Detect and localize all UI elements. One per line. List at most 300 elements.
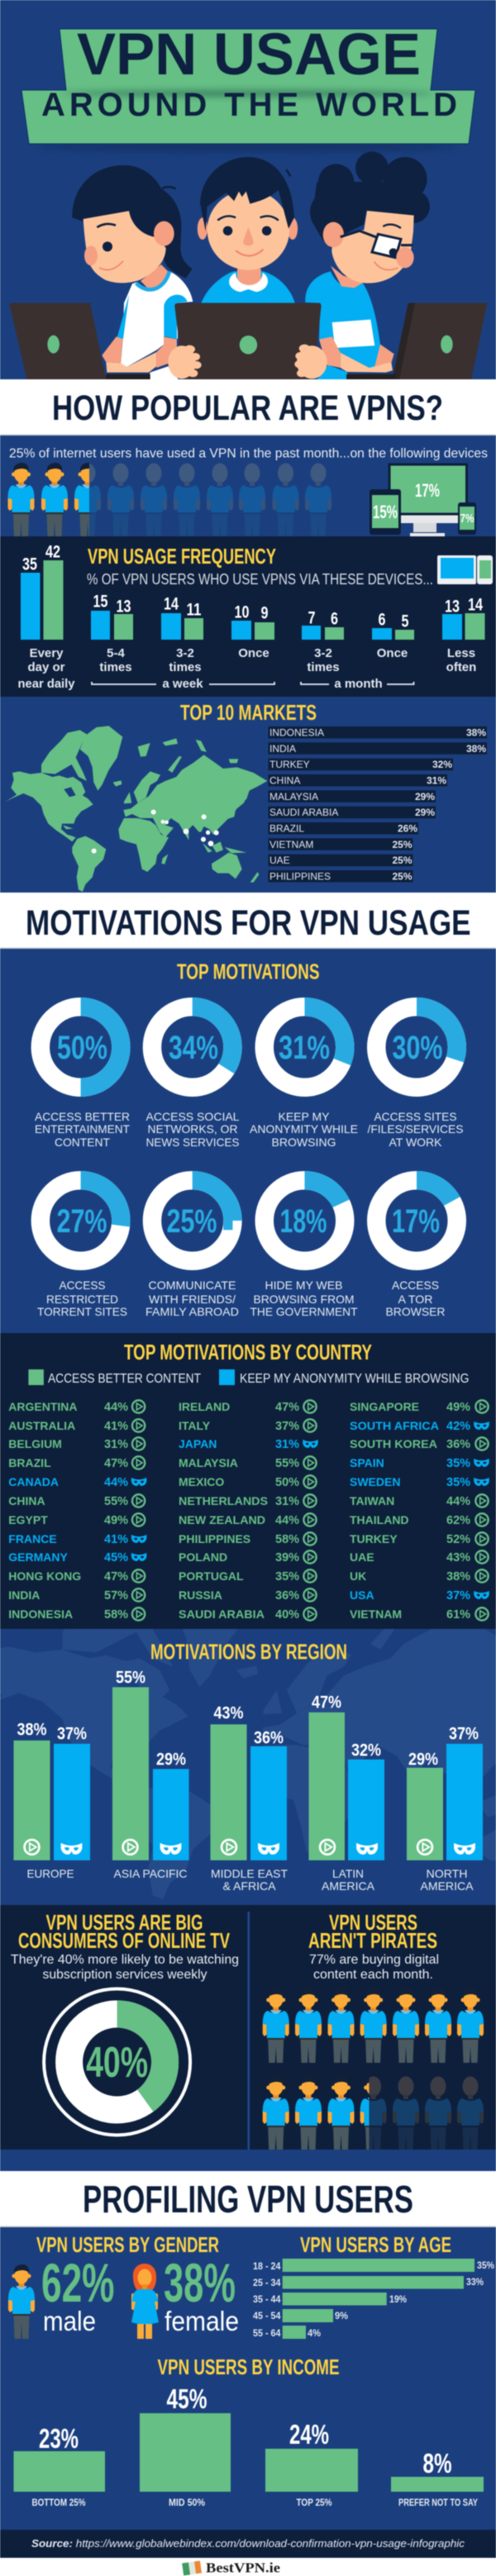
heading: top motivations: TOP MOTIVATIONS	[177, 959, 319, 983]
source bar: Source: https://www.globalwebindex.com/download-confirmation-vpn-usage-infographic	[31, 2537, 465, 2550]
ranked markets bar list: CHINA	[269, 775, 300, 787]
bar chart: regions: 55%	[116, 1668, 145, 1688]
donut: 50% entertainment: ACCESS BETTER	[35, 1110, 130, 1123]
ranked markets bar list: 29%	[415, 791, 435, 802]
heading: top 10 markets: TOP 10 MARKETS	[180, 700, 317, 725]
bar chart: age: 35 - 44	[253, 2293, 281, 2305]
title banner	[21, 22, 475, 151]
panel: top motivations by country	[0, 1333, 496, 1629]
row: Saudi Arabia: SAUDI ARABIA	[179, 1607, 265, 1621]
device usage statement: 25% of internet users have used a VPN in the past month...on the following devices	[9, 446, 488, 461]
laptop: centre	[174, 303, 322, 379]
row: Brazil: 47%	[104, 1457, 128, 1470]
donut: 18% hide browsing: 18%	[279, 1203, 327, 1240]
donut: 25% communicate abroad	[145, 1180, 239, 1318]
row: South Africa	[350, 1419, 489, 1433]
row: Malaysia: 55%	[275, 1457, 299, 1470]
legend: KEEP MY ANONYMITY WHILE BROWSING	[240, 1372, 470, 1386]
row: USA	[350, 1588, 489, 1602]
ranked markets bar list: TURKEY	[269, 759, 310, 770]
frequency category labels: 3-2	[176, 646, 194, 660]
panel: motivations by region	[0, 1628, 496, 1906]
row: South Korea: 36%	[446, 1438, 470, 1451]
icon: laptop and tablet legend	[437, 555, 493, 584]
row: Philippines: 58%	[275, 1533, 299, 1546]
frequency category labels: times	[99, 660, 132, 674]
footer: BestVPN.ie logo: BestVPN.ie	[206, 2560, 280, 2575]
bar chart: income: 23%	[39, 2423, 79, 2454]
icon: devices with percentages: 17%	[415, 480, 440, 501]
laptop: left	[9, 303, 150, 379]
row: France: 41%	[104, 1533, 128, 1546]
donut: 34% social networks: NEWS SERVICES	[145, 1136, 240, 1149]
heading: usage frequency: VPN USAGE FREQUENCY	[88, 544, 276, 569]
ranked markets bar list: 25%	[392, 871, 413, 883]
donut: 30% work sites: AT WORK	[389, 1136, 442, 1149]
ranked markets bar list: INDIA	[269, 743, 296, 755]
bar chart: frequency by device: 6	[331, 610, 338, 628]
donut: 31% anonymity	[250, 1007, 358, 1149]
bar chart: frequency by device: 13	[116, 597, 131, 617]
spacer strip	[0, 2150, 496, 2171]
bar chart: frequency by device: 7	[308, 608, 316, 628]
row: Thailand	[350, 1513, 489, 1527]
row: Spain	[350, 1456, 489, 1470]
title banner: AROUND THE WORLD	[41, 87, 457, 123]
region labels: ASIA PACIFIC	[114, 1867, 187, 1880]
heading: by country: TOP MOTIVATIONS BY COUNTRY	[124, 1340, 372, 1364]
row: Italy: 37%	[275, 1420, 299, 1433]
donut: 34% social networks: 34%	[169, 1030, 218, 1066]
row: Russia: 36%	[275, 1589, 299, 1602]
donut: 31% anonymity: ANONYMITY WHILE	[250, 1122, 358, 1136]
ranked markets bar list: INDONESIA	[269, 727, 324, 739]
frequency category labels: a month	[334, 677, 383, 691]
region labels: EUROPE	[26, 1867, 74, 1880]
world map with market dots	[6, 726, 267, 892]
icon row: 25% of people highlighted	[8, 463, 331, 537]
row: South Korea: SOUTH KOREA	[350, 1437, 437, 1450]
region labels: LATIN	[332, 1867, 364, 1880]
pirates text block: VPN USERS	[329, 1910, 417, 1935]
bar chart: age: 25 - 34	[253, 2277, 281, 2288]
donut: 18% hide browsing: BROWSING FROM	[253, 1293, 354, 1306]
donut: 18% hide browsing	[250, 1180, 358, 1318]
donut: 25% communicate abroad: COMMUNICATE	[149, 1278, 236, 1292]
panel: profiling	[0, 2227, 496, 2530]
row: Singapore: SINGAPORE	[350, 1400, 419, 1413]
online TV text block	[11, 1910, 239, 1982]
bar chart: frequency by device: 5	[402, 612, 409, 631]
row: Portugal: 35%	[275, 1570, 299, 1583]
bar chart: frequency by device: 10	[235, 603, 250, 621]
row: Philippines	[179, 1532, 317, 1546]
donut: 17% tor browser: BROWSER	[385, 1305, 445, 1318]
bar chart: age	[253, 2259, 494, 2339]
row: South Korea	[350, 1437, 489, 1451]
row: Egypt: EGYPT	[8, 1513, 48, 1526]
section band: profiling VPN users	[0, 2171, 496, 2228]
donut: 25% communicate abroad: 25%	[167, 1203, 217, 1240]
heading: by region: MOTIVATIONS BY REGION	[150, 1640, 347, 1664]
country column 2	[179, 1400, 318, 1621]
illustration: three people on laptops	[9, 151, 487, 380]
row: Vietnam	[350, 1607, 489, 1621]
row: Singapore	[350, 1400, 489, 1414]
row: Portugal: PORTUGAL	[179, 1569, 244, 1583]
ranked markets bar list: 32%	[432, 759, 452, 770]
online TV text block: CONSUMERS OF ONLINE TV	[18, 1928, 230, 1953]
ranked markets bar list: 38%	[466, 743, 486, 755]
bar chart: income: MID 50%	[169, 2497, 205, 2508]
panel: top motivations	[0, 949, 496, 1333]
ranked markets bar list: 25%	[392, 839, 413, 850]
frequency category labels: Once	[377, 646, 408, 660]
row: Russia	[179, 1588, 317, 1602]
heading: income: VPN USERS BY INCOME	[157, 2355, 339, 2379]
donut: 31% anonymity: BROWSING	[271, 1136, 336, 1149]
donut: 31% anonymity: 31%	[279, 1030, 330, 1066]
donut: 30% work sites	[367, 1007, 463, 1149]
row: Belgium: BELGIUM	[8, 1437, 62, 1450]
bar chart: regions: 37%	[449, 1724, 479, 1744]
region labels: MIDDLE EAST	[211, 1867, 288, 1880]
bar chart: age: 55 - 64	[253, 2327, 281, 2339]
donut: 30% work sites: 30%	[392, 1030, 443, 1066]
row: UAE: UAE	[350, 1550, 374, 1564]
row: Sweden	[350, 1475, 489, 1489]
row: Netherlands: 31%	[275, 1495, 299, 1508]
frequency category labels	[18, 646, 476, 691]
laptop: right	[346, 303, 487, 379]
row: Poland: 39%	[275, 1551, 299, 1564]
bar chart: frequency by device: 15	[93, 592, 108, 612]
bar chart: frequency by device: 6	[379, 610, 385, 630]
row: Hong Kong: HONG KONG	[8, 1569, 81, 1583]
stat: female 38%: 38%	[164, 2252, 236, 2313]
row: Canada	[8, 1475, 146, 1489]
row: Australia: 41%	[104, 1420, 128, 1433]
row: Taiwan: TAIWAN	[350, 1494, 394, 1507]
donut: 27% torrent sites: ACCESS	[60, 1278, 106, 1292]
bar chart: frequency by device: 9	[261, 603, 268, 623]
panel: device usage	[0, 436, 496, 537]
hero panel	[0, 0, 496, 380]
frequency category labels: 3-2	[314, 646, 332, 660]
bar chart: income	[13, 2383, 484, 2508]
frequency category labels: Less	[447, 646, 475, 660]
row: Thailand: 62%	[446, 1514, 470, 1527]
bar chart: income: TOP 25%	[296, 2497, 332, 2508]
row: UK: UK	[350, 1569, 366, 1583]
row: Mexico	[179, 1475, 317, 1489]
row: Japan: JAPAN	[179, 1437, 217, 1450]
row: Argentina: ARGENTINA	[8, 1400, 78, 1413]
frequency category labels: times	[169, 660, 202, 674]
stat: female 38%	[164, 2252, 239, 2336]
row: Mexico: MEXICO	[179, 1475, 224, 1488]
country column 3	[350, 1400, 489, 1621]
region labels: NORTH	[427, 1867, 468, 1880]
row: Japan: 31%	[275, 1438, 299, 1451]
row: Malaysia: MALAYSIA	[179, 1456, 238, 1469]
row: Taiwan: 44%	[446, 1495, 470, 1508]
row: Hong Kong	[8, 1569, 145, 1583]
icon: devices with percentages: 7%	[460, 512, 475, 526]
panel: VPN usage frequency	[0, 536, 496, 697]
donut: 50% entertainment	[35, 1007, 130, 1149]
donut: 27% torrent sites: TORRENT SITES	[37, 1305, 127, 1318]
row: New Zealand: 44%	[275, 1514, 299, 1527]
region labels: AMERICA	[322, 1879, 375, 1893]
donut: 27% torrent sites: RESTRICTED	[46, 1293, 118, 1306]
frequency category labels: 5-4	[107, 646, 125, 660]
frequency category labels: a week	[162, 677, 203, 691]
stat: male 62%: male	[43, 2306, 96, 2336]
bar chart: frequency by device: 42	[45, 542, 60, 562]
bar chart: regions: 29%	[408, 1750, 438, 1769]
ranked markets bar list: VIETNAM	[269, 839, 313, 850]
row: Singapore: 49%	[446, 1401, 470, 1414]
row: Netherlands	[179, 1494, 317, 1508]
row: Turkey: 52%	[446, 1533, 470, 1546]
panel: online TV and pirates	[0, 1905, 496, 2150]
row: Belgium	[8, 1437, 145, 1451]
online TV text block: subscription services weekly	[43, 1968, 207, 1982]
row: UAE	[350, 1550, 489, 1564]
bar chart: age: 4%	[308, 2327, 321, 2339]
donut: 30% work sites: /FILES/SERVICES	[367, 1122, 463, 1136]
row: USA: 37%	[446, 1589, 470, 1602]
icon: devices with percentages: 15%	[373, 502, 398, 522]
donut: 18% hide browsing: THE GOVERNMENT	[250, 1305, 358, 1318]
row: Japan	[179, 1437, 318, 1451]
row: France: FRANCE	[8, 1532, 57, 1545]
source bar	[0, 2530, 496, 2558]
legend	[28, 1369, 469, 1386]
row: Germany: GERMANY	[8, 1550, 69, 1564]
row: Italy: ITALY	[179, 1419, 211, 1432]
donut: 18% hide browsing: HIDE MY WEB	[265, 1278, 342, 1292]
bar chart: regions: 32%	[351, 1740, 381, 1760]
donut: 40% online TV: 40%	[86, 2039, 148, 2087]
bar chart: frequency by device: 14	[468, 595, 483, 615]
row: UAE: 43%	[446, 1551, 470, 1564]
region labels	[26, 1867, 474, 1893]
bar chart: regions: 47%	[312, 1693, 341, 1712]
bar chart: age: 33%	[466, 2276, 484, 2288]
row: Germany	[8, 1550, 146, 1564]
row: USA: USA	[350, 1588, 374, 1602]
donut: 25% communicate abroad: FAMILY ABROAD	[145, 1305, 239, 1318]
character: boy in centre	[198, 157, 298, 303]
ranked markets bar list: UAE	[269, 855, 290, 866]
online TV text block: They're 40% more likely to be watching	[11, 1953, 239, 1967]
row: Indonesia	[8, 1607, 145, 1621]
subheading: % OF VPN USERS WHO USE VPNS VIA THESE DEVICES...	[87, 571, 433, 588]
donut: 27% torrent sites	[37, 1180, 127, 1318]
icon grid: 77% of people highlighted	[263, 1988, 484, 2150]
row: India	[8, 1588, 145, 1602]
row: New Zealand: NEW ZEALAND	[179, 1513, 265, 1526]
row: Malaysia	[179, 1456, 317, 1470]
ranked markets bar list: PHILIPPINES	[269, 871, 331, 883]
bar chart: income: 8%	[423, 2448, 451, 2478]
row: Argentina: 44%	[104, 1401, 128, 1414]
row: New Zealand	[179, 1513, 317, 1527]
row: Spain: SPAIN	[350, 1456, 384, 1469]
bar chart: frequency by device: 35	[22, 555, 37, 574]
panel: top 10 markets	[0, 697, 496, 893]
ranked markets bar list: SAUDI ARABIA	[269, 807, 338, 818]
ranked markets bar list: 38%	[466, 727, 486, 739]
ranked markets bar list: 25%	[392, 855, 413, 866]
frequency category labels: Once	[238, 646, 269, 660]
ranked markets bar list: 31%	[427, 775, 446, 787]
row: Indonesia: INDONESIA	[8, 1607, 73, 1621]
frequency category labels: day or	[27, 660, 65, 674]
row: India: INDIA	[8, 1588, 40, 1602]
row: Belgium: 31%	[104, 1438, 128, 1451]
frequency category labels: Every	[30, 646, 64, 660]
region labels: AMERICA	[420, 1879, 474, 1893]
row: India: 57%	[104, 1589, 128, 1602]
row: Netherlands: NETHERLANDS	[179, 1494, 268, 1507]
row: Philippines: PHILIPPINES	[179, 1532, 250, 1545]
pirates text block	[308, 1910, 439, 1982]
row: South Africa: SOUTH AFRICA	[350, 1419, 439, 1432]
row: Australia: AUSTRALIA	[8, 1419, 75, 1432]
row: Spain: 35%	[446, 1457, 470, 1470]
row: Poland	[179, 1550, 317, 1564]
row: Brazil: BRAZIL	[8, 1456, 51, 1469]
row: Turkey	[350, 1532, 489, 1546]
row: Russia: RUSSIA	[179, 1588, 222, 1602]
stat: male 62%	[41, 2252, 114, 2336]
bar chart: age: 18 - 24	[253, 2260, 281, 2272]
row: Italy	[179, 1419, 317, 1433]
row: Poland: POLAND	[179, 1550, 227, 1564]
row: Saudi Arabia: 40%	[275, 1608, 299, 1621]
row: South Africa: 42%	[446, 1420, 470, 1433]
frequency category labels: times	[307, 660, 340, 674]
row: Turkey: TURKEY	[350, 1532, 398, 1545]
icon: male figure	[8, 2264, 35, 2339]
row: Sweden: SWEDEN	[350, 1475, 400, 1488]
bar chart: regions	[13, 1668, 483, 1860]
stat: female 38%: female	[165, 2306, 239, 2336]
donut: 34% social networks: NETWORKS, OR	[147, 1122, 238, 1136]
donut: 17% tor browser: 17%	[392, 1203, 440, 1240]
bar chart: income: 45%	[167, 2383, 207, 2414]
character: curly-haired boy with glasses	[305, 151, 430, 379]
legend: ACCESS BETTER CONTENT	[48, 1372, 201, 1386]
donut: 34% social networks	[145, 1007, 240, 1149]
row: Germany: 45%	[104, 1551, 128, 1564]
frequency category labels: near daily	[18, 677, 75, 691]
bar chart: frequency by device	[21, 542, 484, 640]
row: Australia	[8, 1419, 145, 1433]
row: Hong Kong: 47%	[104, 1570, 128, 1583]
row: China: 55%	[104, 1495, 128, 1508]
row: Brazil	[8, 1456, 145, 1470]
ranked markets bar list: BRAZIL	[269, 823, 304, 835]
row: Sweden: 35%	[446, 1476, 470, 1489]
row: Argentina	[8, 1400, 145, 1414]
row: Mexico: 50%	[275, 1476, 299, 1489]
donut: 50% entertainment: CONTENT	[55, 1136, 110, 1149]
icon: Irish flag	[182, 2561, 202, 2575]
donut: 50% entertainment: 50%	[57, 1030, 107, 1066]
footer: BestVPN.ie logo	[0, 2558, 496, 2576]
icon: devices with percentages	[370, 464, 476, 536]
heading: gender: VPN USERS BY GENDER	[36, 2232, 219, 2257]
row: China	[8, 1494, 145, 1508]
bar chart: age: 19%	[389, 2293, 407, 2305]
row: Ireland: IRELAND	[179, 1400, 230, 1413]
donut: 27% torrent sites: 27%	[56, 1203, 107, 1240]
row: UK	[350, 1569, 489, 1583]
row: Thailand: THAILAND	[350, 1513, 409, 1526]
bar chart: regions: 29%	[156, 1750, 186, 1769]
bar chart: regions: 43%	[213, 1704, 244, 1722]
donut: 17% tor browser: A TOR	[398, 1293, 433, 1306]
title banner: VPN USAGE	[77, 22, 421, 88]
ranked markets bar list: 26%	[398, 823, 417, 835]
row: Ireland: 47%	[275, 1401, 299, 1414]
pirates text block: 77% are buying digital	[309, 1953, 439, 1967]
donut: 30% work sites: ACCESS SITES	[374, 1110, 456, 1123]
bar chart: frequency by device: 14	[164, 595, 179, 613]
ranked markets bar list	[268, 726, 487, 883]
donut: 31% anonymity: KEEP MY	[278, 1110, 330, 1123]
donut: 50% entertainment: ENTERTAINMENT	[35, 1122, 130, 1136]
frequency category labels: often	[446, 660, 476, 674]
section band: how popular are VPNs	[0, 379, 496, 436]
bar chart: regions: 36%	[254, 1729, 284, 1747]
row: Taiwan	[350, 1494, 489, 1508]
pirates text block: content each month.	[313, 1968, 433, 1982]
region labels: & AFRICA	[223, 1879, 276, 1893]
bar chart: frequency by device: 11	[187, 600, 202, 620]
row: Vietnam: 61%	[446, 1608, 470, 1621]
row: Egypt: 49%	[104, 1514, 128, 1527]
faint background world map	[0, 1630, 496, 1899]
online TV text block: VPN USERS ARE BIG	[46, 1910, 203, 1935]
row: Canada: 44%	[104, 1476, 128, 1489]
ranked markets bar list: 29%	[415, 807, 435, 818]
donut: 40% online TV	[44, 1988, 190, 2136]
pirates text block: AREN'T PIRATES	[308, 1928, 437, 1953]
ranked markets bar list: MALAYSIA	[269, 791, 318, 802]
row: Egypt	[8, 1513, 145, 1527]
row: Ireland	[179, 1400, 317, 1414]
bar chart: frequency by device: 13	[445, 597, 460, 617]
bar chart: regions: 37%	[57, 1724, 87, 1744]
bar chart: age: 45 - 54	[253, 2310, 281, 2321]
country column 1	[8, 1400, 146, 1621]
bar chart: regions: 38%	[17, 1721, 47, 1739]
row: China: CHINA	[8, 1494, 45, 1507]
row: France	[8, 1532, 146, 1546]
donut: 17% tor browser: ACCESS	[392, 1278, 439, 1292]
row: Indonesia: 58%	[104, 1608, 128, 1621]
row: Vietnam: VIETNAM	[350, 1607, 402, 1621]
row: UK: 38%	[446, 1570, 470, 1583]
donut: 25% communicate abroad: WITH FRIENDS/	[149, 1293, 236, 1306]
row: Saudi Arabia	[179, 1607, 317, 1621]
bar chart: income: BOTTOM 25%	[31, 2497, 86, 2508]
